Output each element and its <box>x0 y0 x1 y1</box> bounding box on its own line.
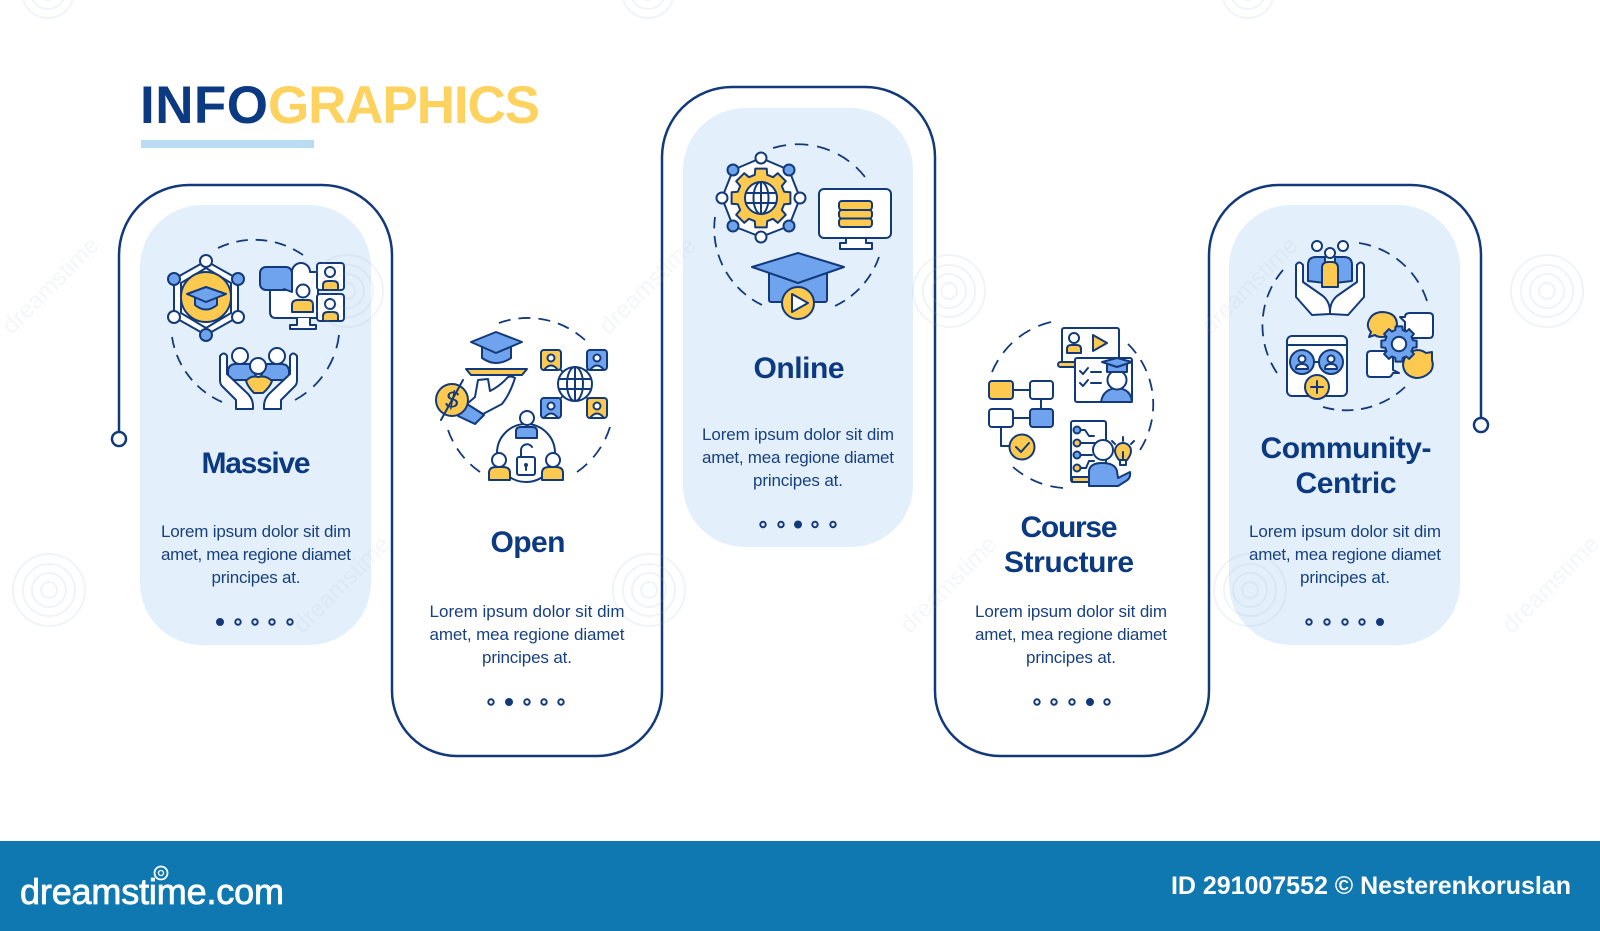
heading: Course Structure: Course <box>1020 511 1118 544</box>
hexagon network <box>168 255 244 341</box>
watermark text: dreamstime <box>288 531 396 639</box>
connecting outline <box>112 87 1488 756</box>
video board and student <box>1058 328 1132 402</box>
watermark text <box>0 232 1600 639</box>
heading: Course Structure: Structure <box>1004 546 1134 579</box>
video cap <box>752 253 844 319</box>
add member window <box>1287 336 1347 399</box>
footer credit: ID 291007552 © Nesterenkoruslan <box>1171 872 1571 900</box>
watermarks <box>13 0 1583 626</box>
text: community body: amet, mea regione diamet <box>1249 545 1441 564</box>
icon: online <box>714 144 891 319</box>
graduation cap on tray <box>436 332 527 424</box>
pagination dots: step 3 <box>760 522 836 528</box>
heading: Online: Online <box>754 352 844 385</box>
title: INFO <box>140 76 268 135</box>
text: course structure body: amet, mea regione diamet <box>975 625 1167 644</box>
panel: online background <box>683 108 913 547</box>
icon: course structure <box>989 322 1153 488</box>
text: course structure body: principes at. <box>1026 648 1116 667</box>
text: course structure body: Lorem ipsum dolor sit dim <box>975 602 1167 621</box>
text: online body: principes at. <box>753 471 843 490</box>
pagination dots: step 5 <box>1306 619 1383 625</box>
icon: community <box>1262 241 1433 410</box>
hands with people <box>1296 241 1364 315</box>
title: GRAPHICS <box>268 76 540 135</box>
heading: Community-Centric: Centric <box>1296 467 1396 500</box>
panel: community background <box>1229 205 1460 645</box>
title underline <box>141 140 314 148</box>
text: massive body: principes at. <box>212 568 300 587</box>
footer logo: dreamstime.com <box>20 871 284 912</box>
pagination dots: step 2 <box>488 699 564 705</box>
text: open body: principes at. <box>482 648 572 667</box>
footer bar <box>0 841 1600 931</box>
heading: Open: Open <box>490 526 566 559</box>
text: massive body: Lorem ipsum dolor sit dim <box>161 522 351 541</box>
online meeting <box>260 263 344 329</box>
panel: massive background <box>140 205 371 645</box>
chat and gear <box>1367 312 1433 378</box>
title <box>140 76 540 135</box>
watermark text: dreamstime <box>594 232 702 340</box>
unlocked group <box>489 411 563 482</box>
watermark text: dreamstime <box>895 531 1003 639</box>
text: online body: Lorem ipsum dolor sit dim <box>702 425 894 444</box>
text: online body: amet, mea regione diamet <box>702 448 894 467</box>
monitor with books <box>819 189 891 249</box>
text: open body: Lorem ipsum dolor sit dim <box>430 602 624 621</box>
document and idea <box>1071 421 1134 486</box>
icon: open <box>436 318 610 482</box>
flowchart <box>989 381 1053 460</box>
text: community body: principes at. <box>1300 568 1390 587</box>
heading: Community-Centric: Community- <box>1260 432 1432 465</box>
watermark text: dreamstime <box>1196 232 1304 340</box>
pagination dots: step 1 <box>217 619 293 625</box>
text: community body: Lorem ipsum dolor sit dim <box>1249 522 1441 541</box>
text: open body: amet, mea regione diamet <box>430 625 625 644</box>
pagination dots: step 4 <box>1034 699 1110 705</box>
gear network <box>716 152 806 242</box>
hands and community <box>220 348 297 409</box>
graduation cap on tray: $ <box>444 387 459 414</box>
text: massive body: amet, mea regione diamet <box>161 545 351 564</box>
icon: massive <box>168 240 344 409</box>
watermark text: dreamstime <box>0 232 105 340</box>
global network <box>541 350 607 418</box>
heading: Massive: Massive <box>202 447 310 480</box>
